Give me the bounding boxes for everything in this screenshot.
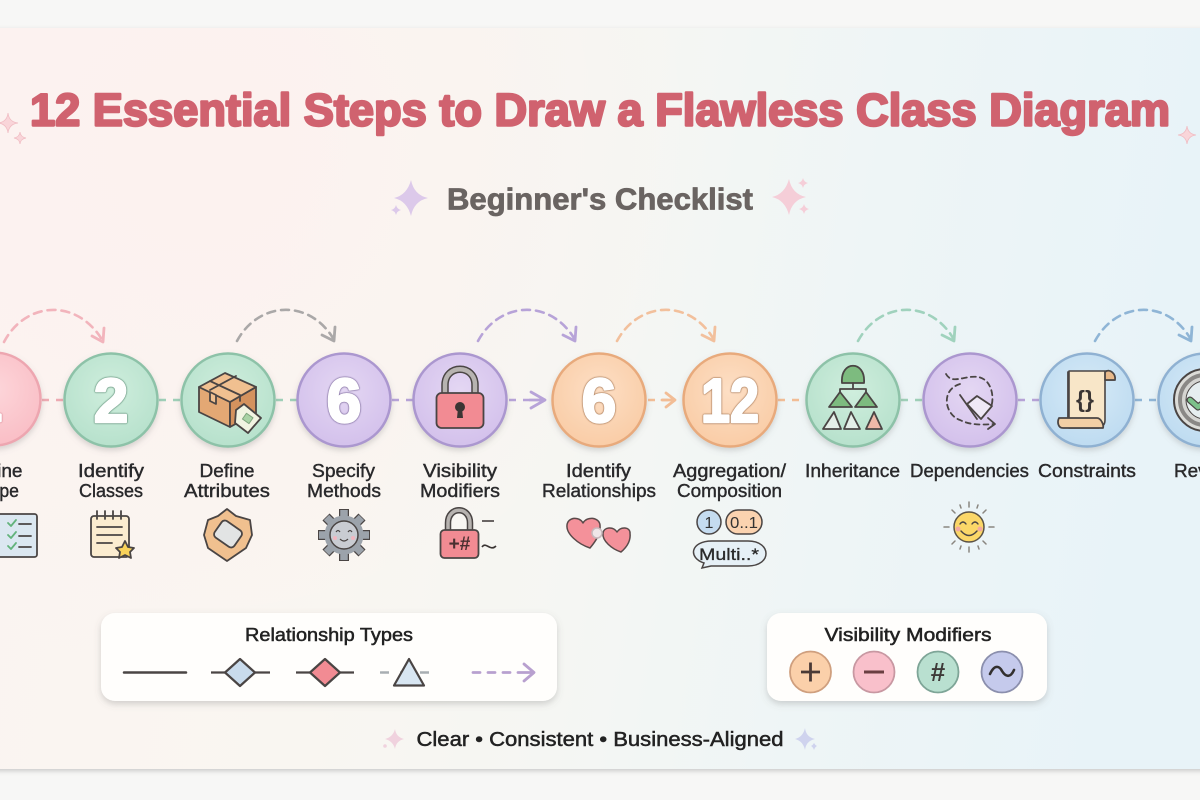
dependency arrow <box>473 664 534 681</box>
association line <box>124 671 186 674</box>
step 2 circle: 2 <box>94 367 128 436</box>
footer sparkle right <box>795 728 817 750</box>
step 4 circle: 6 <box>327 367 361 436</box>
icon: check badge <box>1174 369 1200 431</box>
step labels: Relationships <box>542 481 656 501</box>
icon: hierarchy tree <box>823 366 882 429</box>
title sparkle right <box>1178 126 1196 144</box>
icon: notepad with star <box>91 511 134 558</box>
footer tagline: Clear • Consistent • Business-Aligned <box>416 729 784 751</box>
icon: smiling sun <box>944 502 994 552</box>
step labels <box>0 461 1200 501</box>
panel: visibility modifiers <box>767 613 1047 701</box>
step labels: Specify <box>312 461 375 481</box>
step 1 circle <box>0 352 40 446</box>
step labels: Identify <box>566 461 631 481</box>
icon: multiplicity bubbles <box>694 510 766 568</box>
step 9 circle with dependency icon <box>924 354 1016 446</box>
protected modifier: # <box>931 657 946 687</box>
composition diamond <box>296 659 354 686</box>
step 3 circle with box icon <box>182 354 274 446</box>
small arrow: step 6 to 7 <box>662 393 675 407</box>
step 10 circle with scroll <box>1040 354 1134 446</box>
arc arrow 4 <box>617 310 715 341</box>
step labels: Constraints <box>1038 461 1136 481</box>
title sparkles left <box>0 113 26 144</box>
step 2 circle <box>64 354 158 446</box>
small arrow: step 5 to 6 <box>530 392 545 408</box>
visibility modifiers heading: Visibility Modifiers <box>824 625 992 645</box>
step 5 circle with padlock <box>414 354 506 446</box>
step labels: Aggregation/ <box>673 461 786 481</box>
icon: padlock with modifiers <box>440 510 496 558</box>
icon: checklist <box>0 514 37 557</box>
icon: padlock with modifiers: +# <box>449 534 471 555</box>
step labels: Methods <box>307 481 381 501</box>
step labels: Composition <box>677 481 782 501</box>
aggregation diamond <box>211 659 270 686</box>
icon: multiplicity bubbles: 0..1 <box>730 515 758 532</box>
step labels: Attributes <box>184 481 270 501</box>
subtitle: Beginner's Checklist <box>447 182 753 216</box>
step 8 circle with hierarchy <box>806 354 900 446</box>
step labels: Inheritance <box>805 461 900 481</box>
subtitle sparkle left <box>391 180 428 216</box>
arc arrow 3 <box>478 310 576 341</box>
private modifier <box>854 652 894 692</box>
package modifier <box>982 652 1022 692</box>
step labels: Dependencies <box>910 461 1029 481</box>
arc arrow 5 <box>858 310 955 341</box>
icon: linked hearts <box>567 518 630 552</box>
connectors between steps <box>42 399 1157 401</box>
title: 12 Essential Steps to Draw a Flawless Class Diagram <box>30 84 1170 136</box>
step labels: Define <box>200 461 254 481</box>
step 4 circle <box>298 354 390 446</box>
protected modifier <box>918 652 958 692</box>
subtitle sparkle right <box>772 178 809 215</box>
step labels: Identify <box>78 461 144 481</box>
step 7 circle: 12 <box>701 367 759 436</box>
icon: smiling gear <box>318 509 370 561</box>
icon: box with tag <box>199 373 261 433</box>
panel: relationship types <box>101 613 557 701</box>
icon: multiplicity bubbles: 1 <box>705 515 714 532</box>
public modifier <box>790 652 831 692</box>
icon: attribute badge <box>204 509 252 561</box>
footer sparkle left <box>383 729 404 749</box>
step labels: Classes <box>79 481 143 501</box>
icon: dependency paths <box>946 374 995 429</box>
icon: scroll with braces: {} <box>1076 386 1094 412</box>
step 6 circle: 6 <box>582 367 616 436</box>
step 11 circle with check badge <box>1158 354 1200 446</box>
step labels: Modifiers <box>420 481 500 501</box>
step labels: Visibility <box>423 461 497 481</box>
arc arrow 2 <box>237 310 335 341</box>
relationship types heading: Relationship Types <box>245 625 413 645</box>
step 7 circle <box>684 354 776 446</box>
icon: padlock <box>436 369 484 428</box>
inheritance triangle <box>380 659 440 686</box>
icon: multiplicity bubbles: Multi..* <box>699 545 759 564</box>
step 6 circle <box>552 354 646 446</box>
arc arrow 1 <box>4 310 104 342</box>
arc arrow 6 <box>1095 310 1192 341</box>
